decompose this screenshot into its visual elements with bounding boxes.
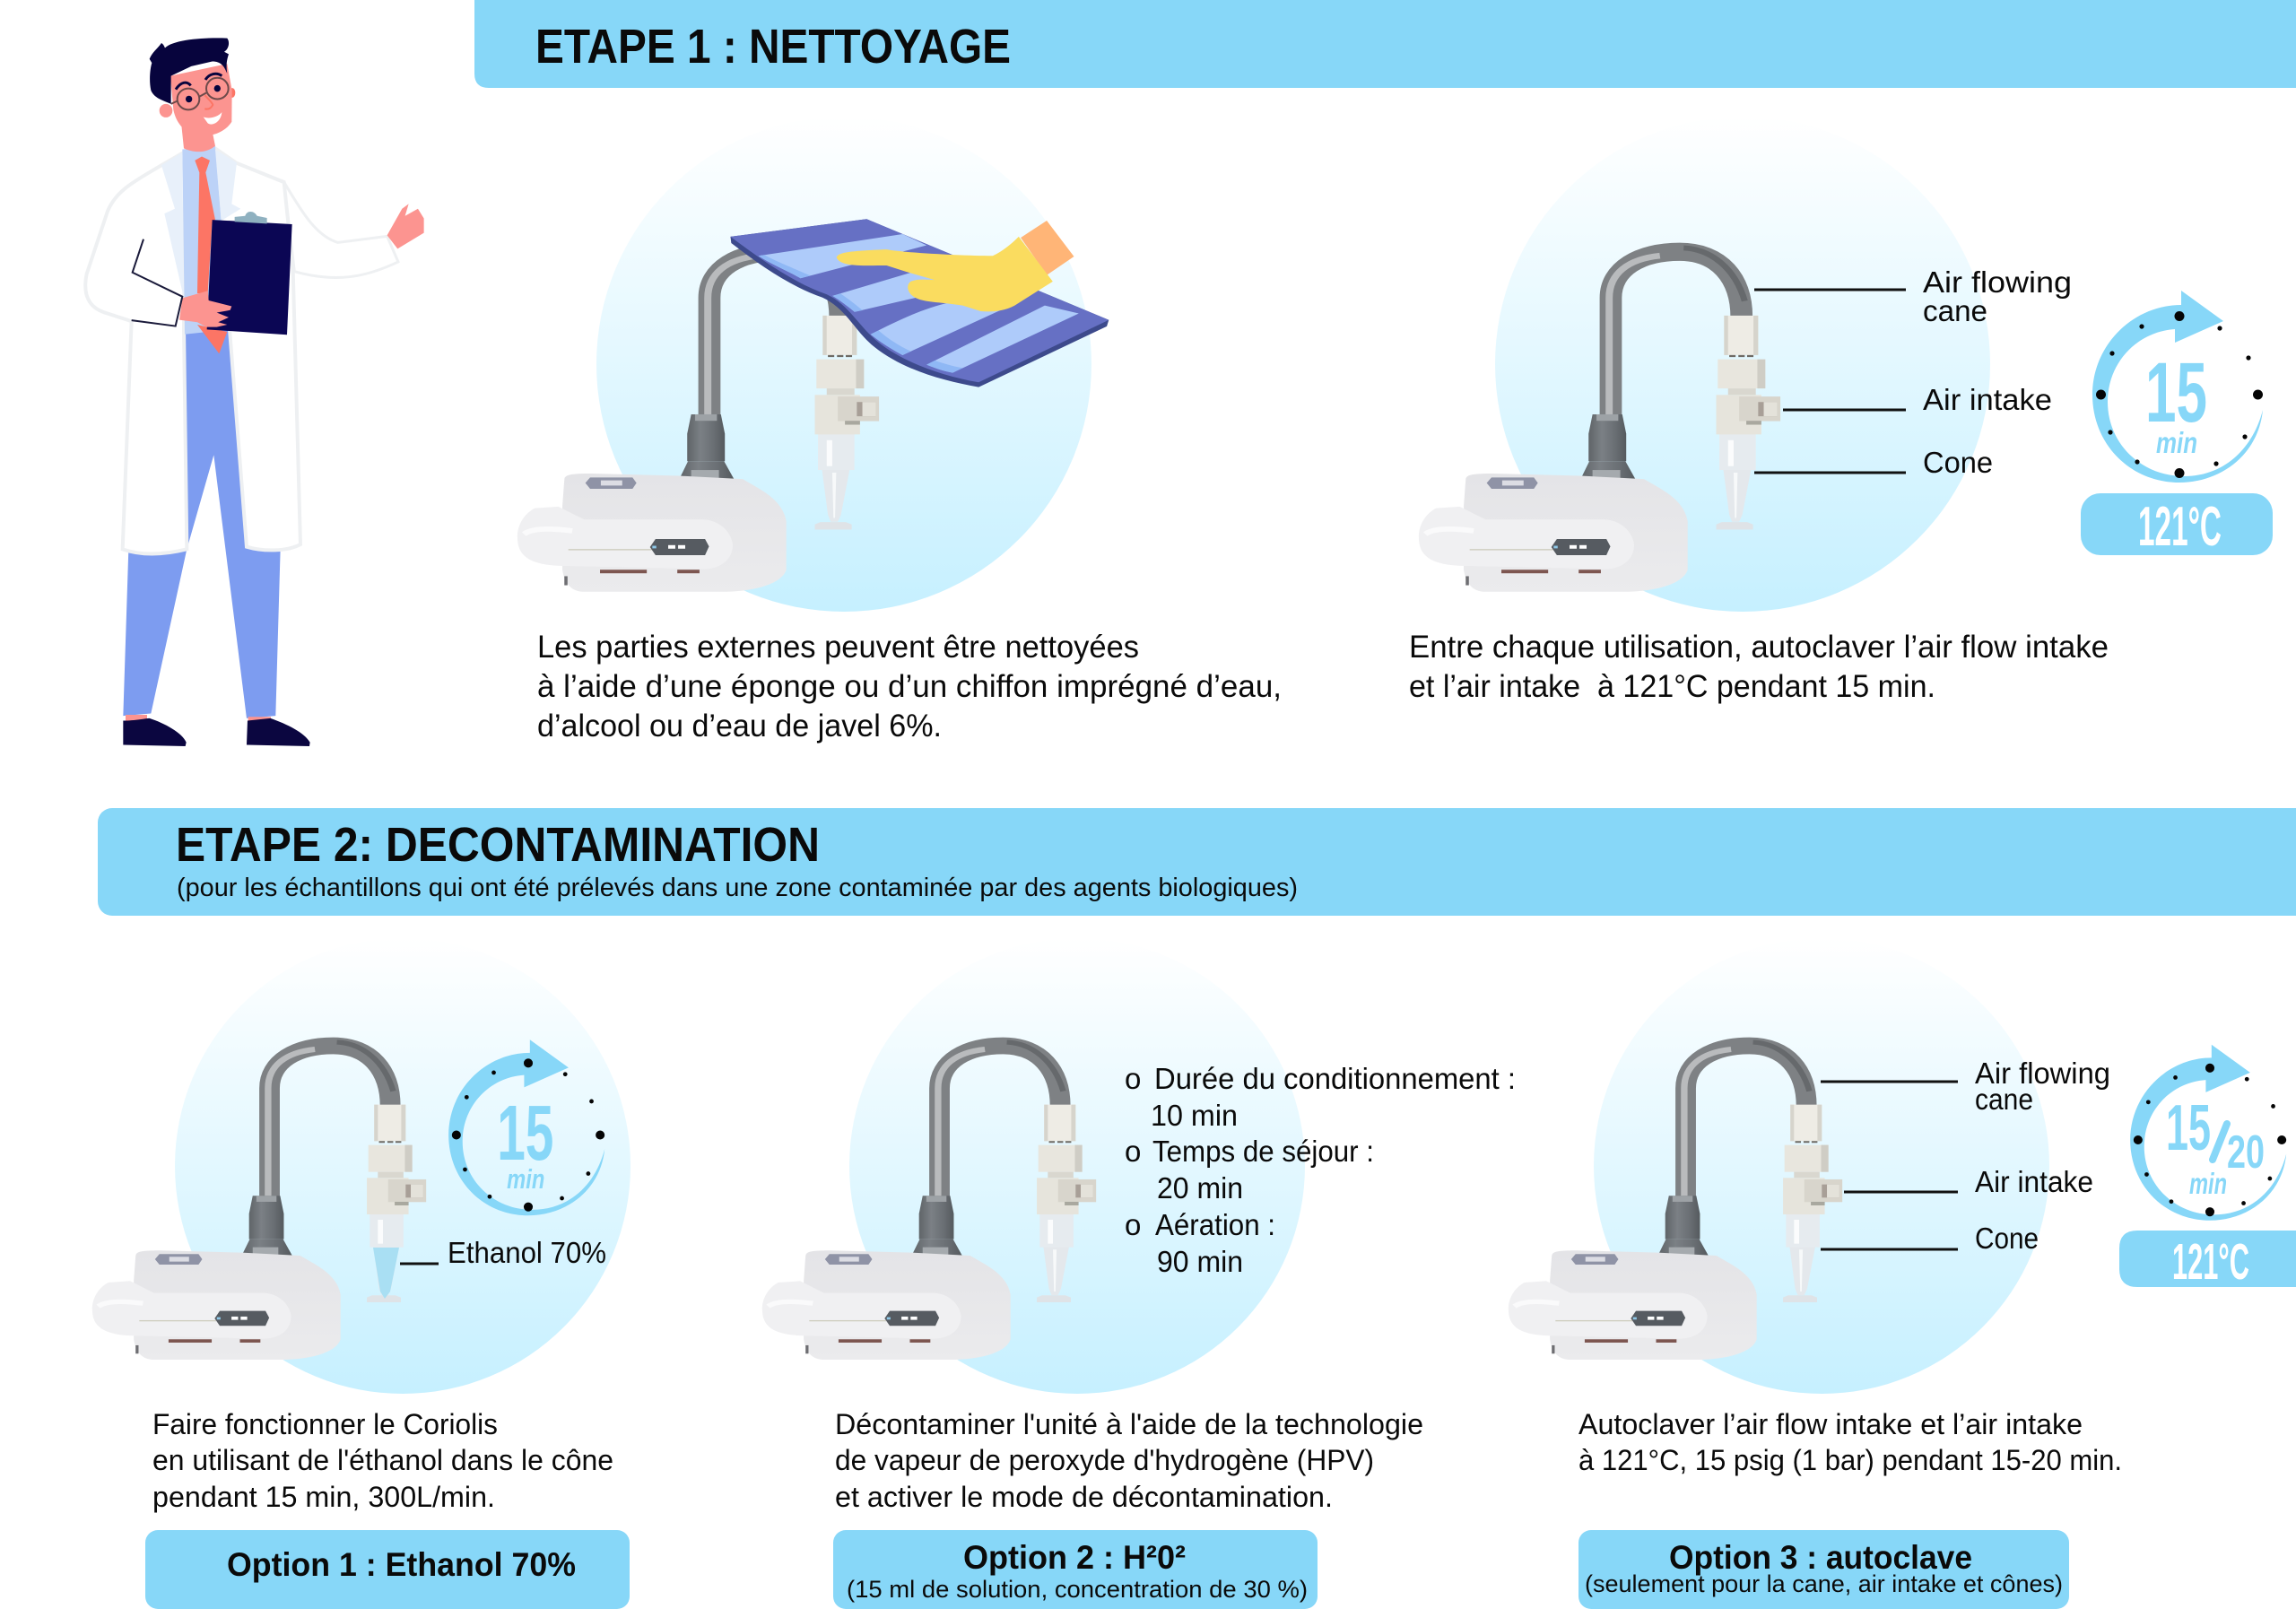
list: H2O2 cycle durations: 90 min [1157, 1245, 1243, 1278]
text: option 2 instructions: de vapeur de peroxyde d'hydrogène (HPV) [835, 1444, 1374, 1476]
header: step 2 bar: ETAPE 2: DECONTAMINATION [176, 818, 820, 872]
text: option 2 instructions: Décontaminer l'unité à l'aide de la technologie [835, 1408, 1423, 1440]
button: option 3: (seulement pour la cane, air intake et cônes) [1585, 1570, 2063, 1597]
icon: 15 minute timer: min [507, 1165, 544, 1195]
text: option 1 instructions [152, 1408, 613, 1513]
illustration: doctor with clipboard [85, 38, 424, 746]
panel: autoclave between uses illustration: Air flowing [1923, 265, 2072, 299]
list: H2O2 cycle durations: Temps de séjour : [1152, 1135, 1374, 1168]
list: H2O2 cycle durations: Durée du conditionnement : [1154, 1062, 1516, 1095]
badge: 121 degrees [2081, 493, 2273, 558]
text: autoclave instructions: Entre chaque utilisation, autoclaver l’air flow intake [1409, 630, 2109, 665]
icon: 15 minute timer: 15 [2145, 345, 2207, 440]
list: H2O2 cycle durations: o [1125, 1208, 1141, 1241]
button: option 1 [145, 1530, 630, 1609]
icon: 15 minute timer [2092, 291, 2263, 483]
panel: autoclave between uses illustration [1419, 117, 2072, 612]
text: option 1 instructions: Faire fonctionner le Coriolis [152, 1408, 498, 1440]
panel: option 1 illustration: Ethanol 70% [448, 1236, 606, 1269]
button: option 2 [833, 1530, 1318, 1609]
text: external cleaning instructions [537, 630, 1282, 744]
button: option 2: (15 ml de solution, concentration de 30 %) [847, 1576, 1308, 1603]
list: H2O2 cycle durations [1125, 1062, 1516, 1278]
panel: autoclave between uses illustration: cane [1923, 294, 1987, 327]
button: option 3 [1578, 1530, 2069, 1609]
panel: external cleaning illustration [517, 117, 1109, 612]
text: option 2 instructions [835, 1408, 1423, 1513]
text: external cleaning instructions: à l’aide d’une éponge ou d’un chiffon imprégné d’eau, [537, 669, 1282, 704]
header: step 1 bar [474, 0, 2296, 88]
list: H2O2 cycle durations: 10 min [1151, 1099, 1238, 1132]
icon: 15 minute timer: min [2156, 426, 2197, 459]
list: H2O2 cycle durations: o [1125, 1062, 1141, 1095]
header: step 1 bar: ETAPE 1 : NETTOYAGE [535, 20, 1011, 74]
panel: option 3 illustration: cane [1975, 1083, 2033, 1116]
panel: option 3 illustration: Air flowing [1975, 1057, 2110, 1090]
panel: option 3 illustration [1509, 938, 2110, 1394]
list: H2O2 cycle durations: 20 min [1157, 1171, 1243, 1205]
text: external cleaning instructions: d’alcool ou d’eau de javel 6%. [537, 709, 942, 744]
panel: option 2 illustration [762, 938, 1305, 1394]
panel: autoclave between uses illustration: Cone [1923, 446, 1993, 479]
list: H2O2 cycle durations: Aération : [1155, 1208, 1275, 1241]
panel: option 1 illustration [92, 938, 631, 1394]
text: autoclave instructions [1409, 630, 2109, 704]
panel: option 3 illustration: Air intake [1975, 1165, 2093, 1198]
text: option 3 instructions: à 121°C, 15 psig (1 bar) pendant 15-20 min. [1578, 1444, 2122, 1476]
button: option 3: Option 3 : autoclave [1669, 1539, 1972, 1576]
text: option 2 instructions: et activer le mode de décontamination. [835, 1481, 1333, 1513]
badge: 121 degrees: 121°C [2138, 496, 2222, 558]
icon: 15 minute timer: 15 [497, 1090, 553, 1177]
text: option 1 instructions: en utilisant de l'éthanol dans le cône [152, 1444, 613, 1476]
button: option 1: Option 1 : Ethanol 70% [227, 1546, 576, 1583]
badge: 121 degrees [2119, 1231, 2296, 1291]
list: H2O2 cycle durations: o [1125, 1135, 1141, 1168]
text: option 3 instructions [1578, 1408, 2122, 1476]
header: step 2 bar [98, 808, 2296, 916]
icon: 15 to 20 minute timer [2130, 1045, 2286, 1221]
text: autoclave instructions: et l’air intake à 121°C pendant 15 min. [1409, 669, 1935, 704]
button: option 2: Option 2 : H²0² [963, 1539, 1186, 1576]
icon: 15 to 20 minute timer: min [2189, 1167, 2227, 1200]
text: option 3 instructions: Autoclaver l’air flow intake et l’air intake [1578, 1408, 2083, 1440]
icon: 15 minute timer [448, 1039, 604, 1215]
text: option 1 instructions: pendant 15 min, 300L/min. [152, 1481, 495, 1513]
panel: autoclave between uses illustration: Air intake [1923, 383, 2052, 416]
icon: 15 to 20 minute timer: 15 [2166, 1092, 2211, 1164]
header: step 2 bar: (pour les échantillons qui ont été prélevés dans une zone contaminée par des agents biologiques) [177, 874, 1298, 902]
text: external cleaning instructions: Les parties externes peuvent être nettoyées [537, 630, 1139, 665]
panel: option 3 illustration: Cone [1975, 1222, 2039, 1255]
icon: 15 to 20 minute timer: 20 [2227, 1126, 2265, 1178]
